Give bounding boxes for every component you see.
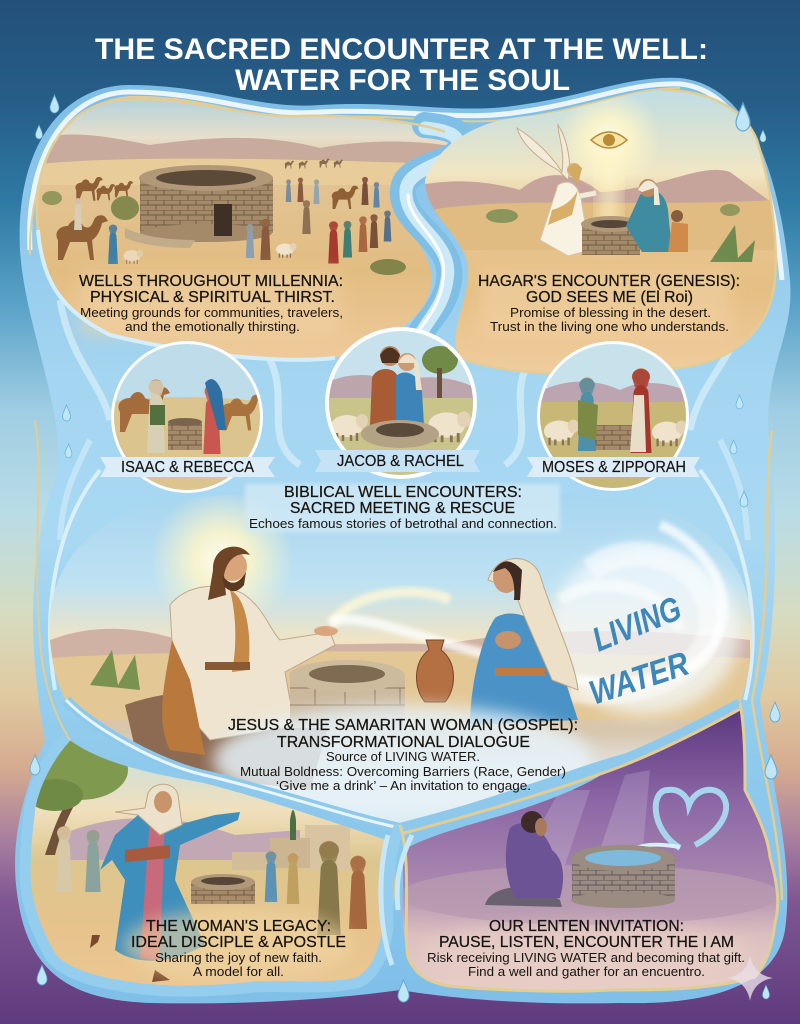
small well [581, 216, 641, 255]
panel: wells throughout millennia [38, 100, 448, 358]
title: WATER FOR THE SOUL [235, 64, 570, 97]
intro block: Biblical well encounters copy: BIBLICAL WELL ENCOUNTERS: [284, 484, 522, 501]
light beams [544, 770, 650, 866]
heading and copy: Sharing the joy of new faith. [155, 950, 322, 965]
heading and copy: Promise of blessing in the desert. [510, 305, 711, 320]
heading and copy: PAUSE, LISTEN, ENCOUNTER THE I AM [439, 934, 734, 951]
intro block: Biblical well encounters copy [245, 484, 560, 532]
intro block: Biblical well encounters copy: Echoes famous stories of betrothal and connection. [249, 516, 557, 531]
hills [420, 170, 775, 230]
water ribbons around lower panels [25, 700, 778, 991]
village [232, 810, 350, 870]
banner: Isaac and Rebecca: ISAAC & REBECCA [121, 459, 255, 476]
clay jug [416, 640, 454, 702]
heading and copy: Meeting grounds for communities, travelers, [80, 305, 343, 320]
banner: Moses and Zipporah: MOSES & ZIPPORAH [542, 459, 686, 476]
panel: Biblical well encounters [100, 327, 700, 495]
running woman [90, 784, 240, 982]
heading and copy: A model for all. [193, 964, 284, 979]
panel: Jesus and the Samaritan woman [40, 480, 760, 830]
heading and copy: GOD SEES ME (El Roi) [526, 289, 693, 306]
banner: Jacob and Rachel [315, 450, 480, 472]
label: living water: WATER [585, 645, 694, 712]
stone well [125, 165, 273, 248]
heading and copy: and the emotionally thirsting. [125, 319, 300, 334]
heart of water [638, 786, 730, 850]
banner: Isaac and Rebecca [100, 457, 275, 477]
panel outlines [37, 90, 776, 374]
background people [56, 826, 367, 935]
heading and copy: WELLS THROUGHOUT MILLENNIA: [79, 273, 343, 290]
circle: Moses and Zipporah [537, 340, 690, 495]
eye of God with rays [566, 96, 652, 218]
hills [46, 134, 446, 164]
heading and copy: HAGAR'S ENCOUNTER (GENESIS): [478, 273, 740, 290]
heading and copy: Find a well and gather for an encuentro. [468, 964, 705, 979]
circle: Isaac and Rebecca [110, 340, 265, 495]
panel: the woman's legacy [20, 730, 400, 995]
heading and copy: Jesus and the Samaritan woman: TRANSFORMATIONAL DIALOGUE [277, 734, 530, 751]
heading and copy: THE WOMAN'S LEGACY: [146, 918, 331, 935]
heading and copy [478, 272, 740, 336]
living water stream [330, 525, 740, 715]
sheep and shrubs [42, 191, 406, 275]
heading and copy [131, 918, 346, 979]
Samaritan woman [470, 559, 578, 725]
heading and copy: Jesus and the Samaritan woman: ‘Give me a drink’ – An invitation to engage. [276, 778, 531, 793]
heading and copy: PHYSICAL & SPIRITUAL THIRST. [90, 289, 335, 306]
rock seat [125, 692, 330, 790]
ground [400, 865, 780, 925]
hills [50, 629, 750, 670]
Hagar and child [626, 179, 688, 252]
label: living water: LIVING [587, 590, 687, 659]
heading and copy: Risk receiving LIVING WATER and becoming that gift. [427, 950, 745, 965]
well [191, 874, 255, 904]
camels [56, 159, 359, 260]
heading and copy [79, 272, 343, 336]
heading and copy: Jesus and the Samaritan woman [228, 717, 578, 793]
hills [60, 818, 300, 860]
intro block: Biblical well encounters copy: SACRED MEETING & RESCUE [290, 500, 515, 517]
heading and copy: Jesus and the Samaritan woman: JESUS & THE SAMARITAN WOMAN (GOSPEL): [228, 717, 578, 734]
angel [517, 125, 596, 256]
people in queue [74, 177, 391, 264]
text glow [213, 705, 593, 815]
heading and copy: IDEAL DISCIPLE & APOSTLE [131, 934, 346, 951]
tree [27, 740, 128, 855]
well with water [571, 845, 675, 908]
sun halo [156, 494, 288, 608]
Jesus [162, 547, 338, 755]
sparkle mark [727, 955, 773, 1001]
title [95, 33, 708, 97]
well [289, 660, 405, 728]
heading and copy: Jesus and the Samaritan woman: Source of LIVING WATER. [326, 749, 480, 764]
shrubs [486, 204, 755, 262]
circle: Jacob and Rachel [325, 327, 480, 483]
river: central stream [403, 125, 463, 350]
panel: our Lenten invitation [400, 700, 780, 995]
label: living water [585, 590, 694, 712]
praying figure [485, 811, 563, 907]
heading and copy [427, 918, 745, 979]
title: THE SACRED ENCOUNTER AT THE WELL: [95, 33, 708, 66]
panel: Hagar's encounter [415, 85, 785, 380]
heading and copy: Trust in the living one who understands. [490, 319, 729, 334]
heading and copy: Jesus and the Samaritan woman: Mutual Boldness: Overcoming Barriers (Race, Gender) [240, 764, 566, 779]
shrub [90, 650, 140, 690]
banner: Jacob and Rachel: JACOB & RACHEL [337, 453, 464, 470]
heading and copy: OUR LENTEN INVITATION: [489, 918, 684, 935]
